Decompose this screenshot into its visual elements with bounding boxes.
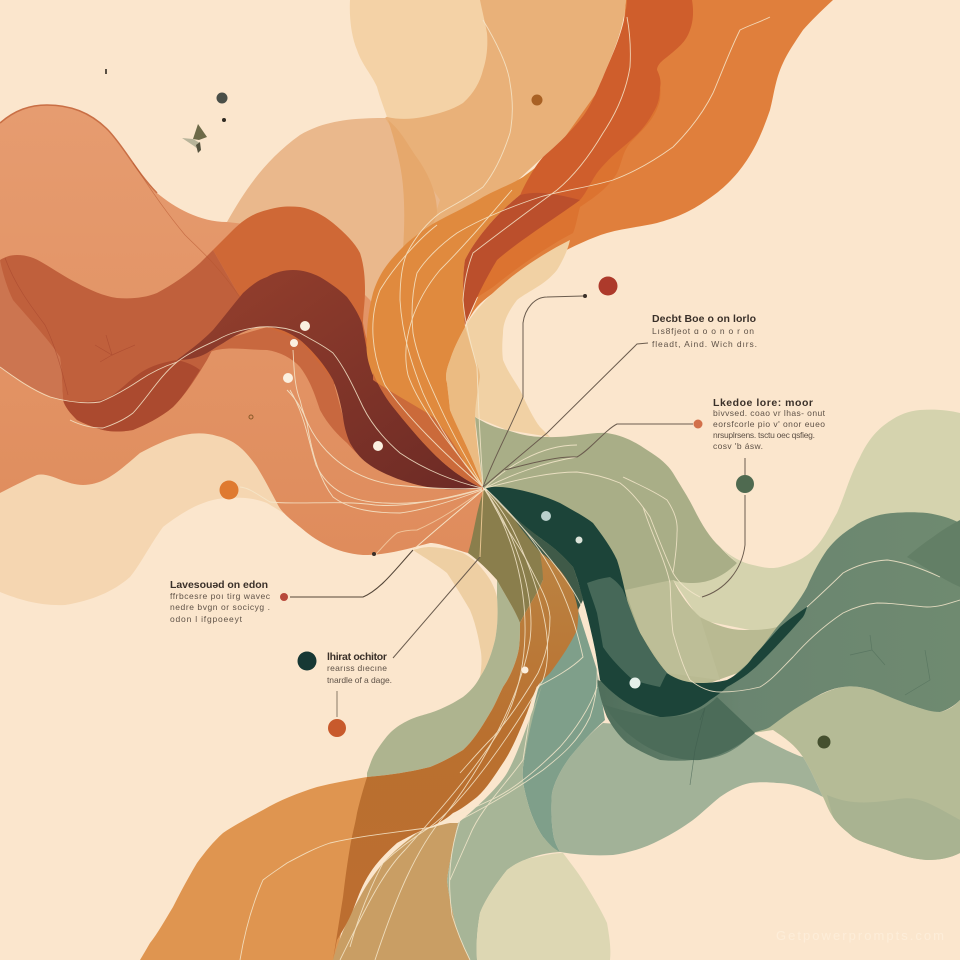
- lower orange ribbons: [140, 547, 520, 960]
- left salmon ribbons: [0, 105, 484, 605]
- callout: right: nrsuplrsens. tsctu oec qsfieg.: [713, 430, 815, 440]
- callout: left: ffrbcesre poı tirg wavec: [170, 591, 271, 601]
- orange flame ribbons: [366, 0, 833, 488]
- dark green ribbon: [485, 487, 807, 717]
- upper orange ribbons: [350, 0, 626, 250]
- callout: left: odon l ifgpoeeyt: [170, 614, 243, 624]
- callout: right: cosv 'b ásw.: [713, 441, 763, 451]
- callout: center: tnardle of a dage.: [327, 675, 392, 685]
- centre brown bands: [333, 490, 583, 960]
- callout: left: Lavesouəd on edon: [170, 579, 268, 591]
- callout: top right: Lıs8fjeot ɑ o o n o r on: [652, 326, 754, 336]
- callout: right: bivvsed. coao vr lhas- onut: [713, 408, 826, 418]
- icon: small dark specks: [105, 69, 228, 153]
- callout: right: Lkedoe lore: moor: [713, 397, 813, 409]
- callout: top right: fleadt, Aind. Wich dırs.: [652, 339, 757, 349]
- connector lines: [290, 296, 745, 717]
- callout: center: lhirat ochitor: [327, 651, 387, 663]
- watermark: Getpowerprompts.com: [776, 928, 944, 943]
- callout: top right: [652, 313, 757, 349]
- callout: top right: Decbt Boe o on lorlo: [652, 313, 756, 325]
- callout: left: nedre bvgn or socicyg .: [170, 602, 270, 612]
- texture cracks: [5, 163, 930, 785]
- callout: right: [713, 397, 826, 451]
- callout: center: [327, 651, 392, 685]
- callout: right: eorsfcorle pio v' onor eueo: [713, 419, 825, 429]
- olive and green wave panels: [447, 410, 960, 960]
- callout: left: [170, 579, 271, 624]
- nodes: [220, 94, 830, 748]
- callout: center: rearıss dıecıne: [327, 663, 387, 673]
